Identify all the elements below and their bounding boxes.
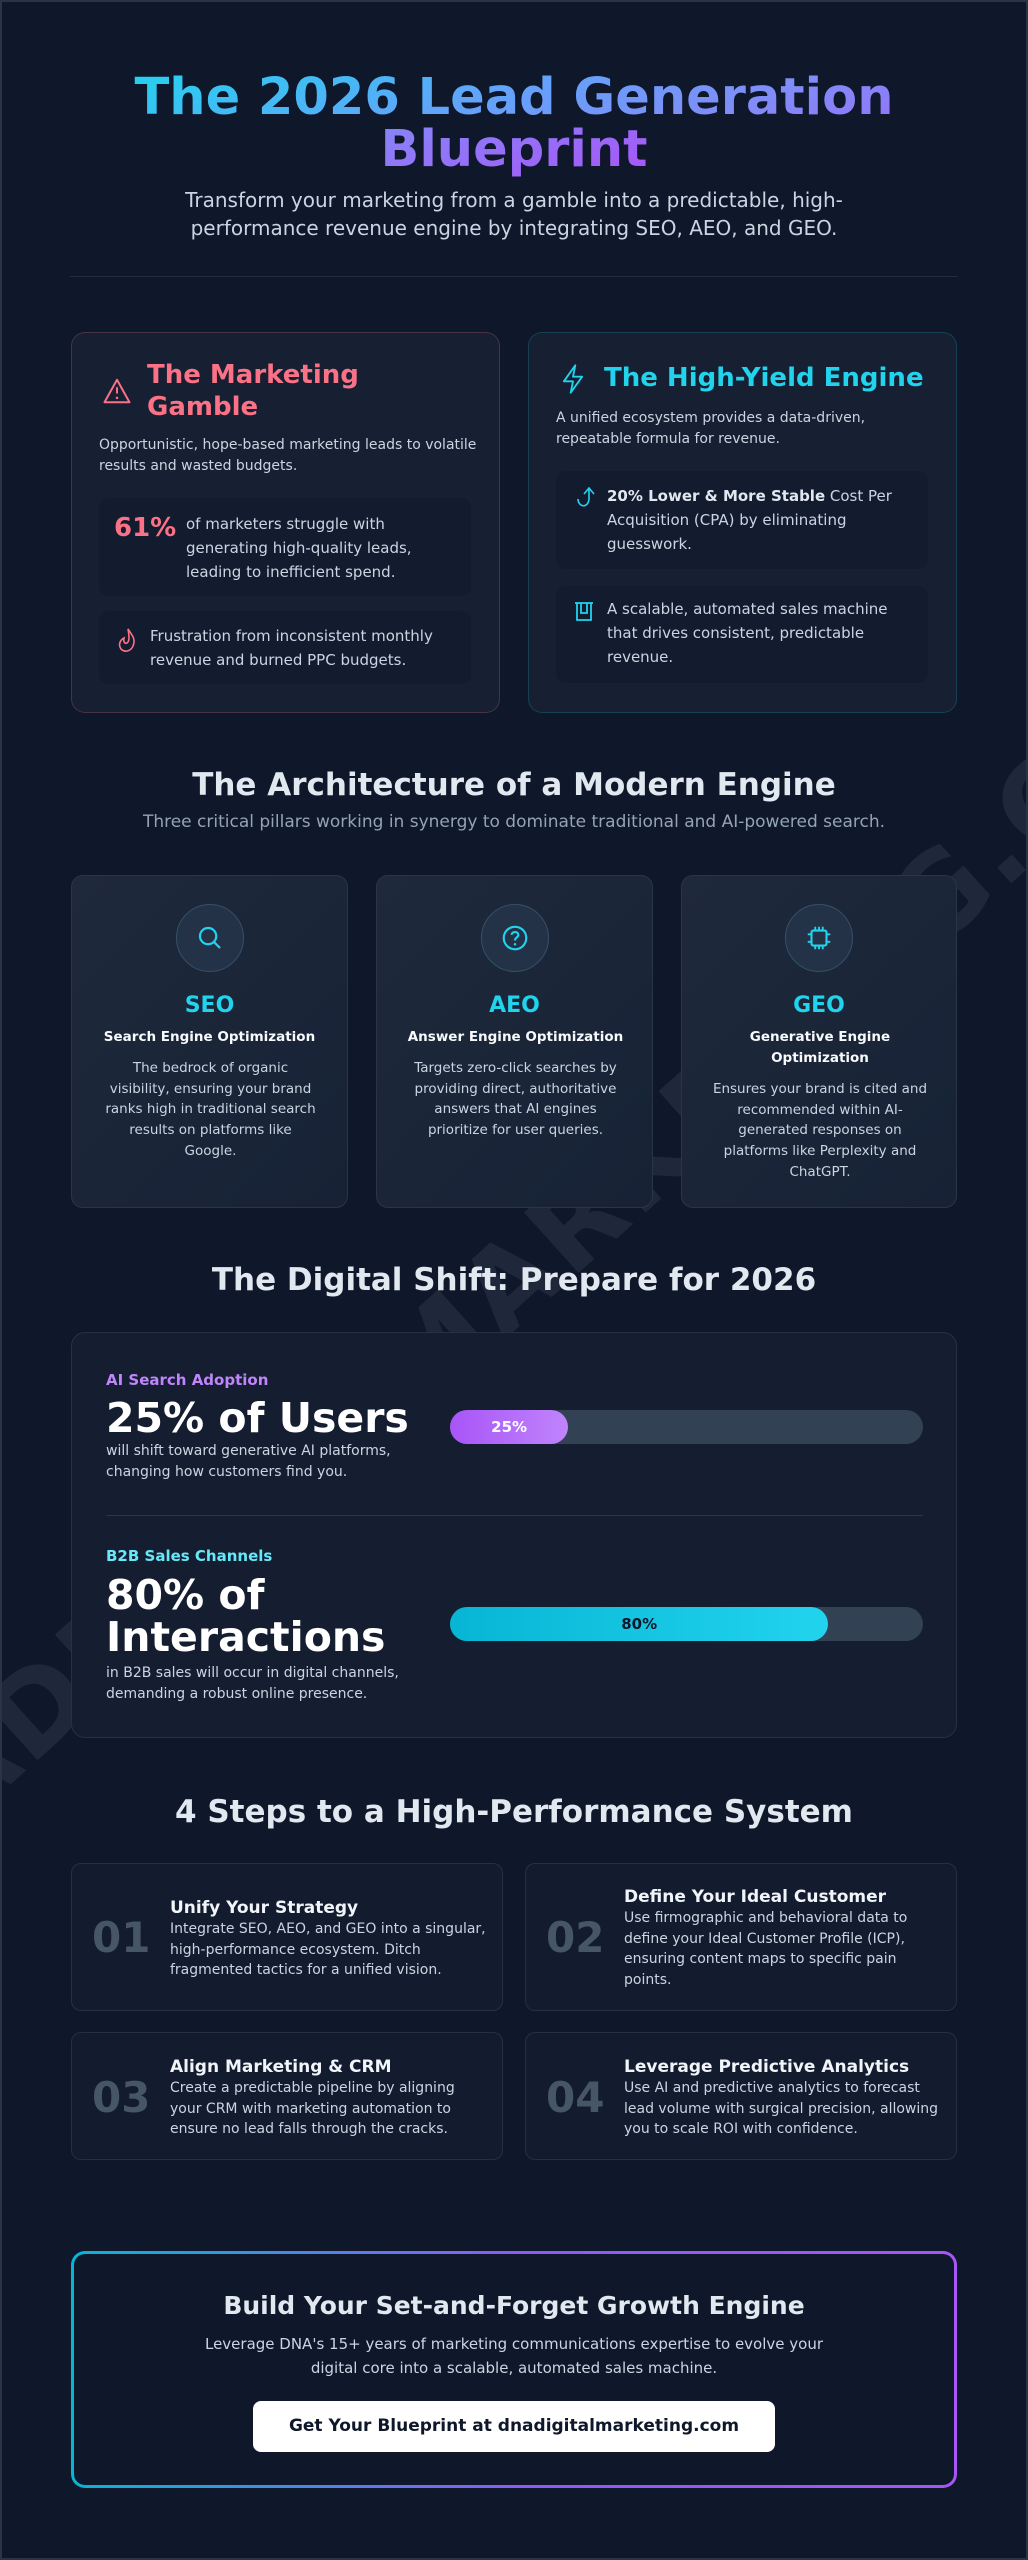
step 01: Integrate SEO, AEO, and GEO into a singular, high-performance ecosystem. Ditch fragmented tactics for a unified vision. (170, 1921, 486, 1978)
card: SEO: The bedrock of organic visibility, ensuring your brand ranks high in traditional search results on platforms like Google. (105, 1060, 316, 1159)
stat box: 61%: of marketers struggle with generating high-quality leads, leading to inefficient spend. (186, 515, 412, 581)
callout: CTA (71, 2251, 957, 2488)
heading: The Marketing (147, 360, 359, 390)
stat: AI search adoption: 25% of Users (106, 1394, 409, 1442)
icon: chip (785, 904, 853, 972)
card: AEO: Targets zero-click searches by providing direct, authoritative answers that AI engines prioritize for user queries. (414, 1060, 617, 1138)
step 04: 04 (546, 2073, 604, 2122)
bar chart: 80% (450, 1607, 923, 1641)
card: SEO: Search Engine Optimization (104, 1029, 315, 1045)
icon: question (480, 904, 548, 972)
heading (147, 360, 359, 422)
step 03 (71, 2032, 503, 2160)
step 03: Create a predictable pipeline by aligning your CRM with marketing automation to ensure no lead falls through the cracks. (170, 2080, 455, 2137)
stat box: frustration (99, 611, 471, 684)
step 02: Define Your Ideal Customer (624, 1887, 886, 1907)
button (253, 2401, 775, 2452)
subheading: architecture: Three critical pillars working in synergy to dominate traditional and AI-powered search. (143, 812, 885, 832)
step 02 (525, 1863, 957, 2011)
card: GEO: Ensures your brand is cited and recommended within AI-generated responses on platforms like Perplexity and ChatGPT. (713, 1081, 927, 1180)
heading: The High-Yield Engine (604, 363, 924, 393)
card: SEO (71, 875, 348, 1208)
icon: warning (104, 378, 130, 404)
card: GEO: Generative Engine Optimization (750, 1029, 890, 1066)
step 01: 01 (92, 1913, 150, 1962)
heading: 4 steps: 4 Steps to a High-Performance System (175, 1794, 853, 1830)
icon: lightning (562, 364, 584, 394)
stat box: 61% (99, 498, 471, 596)
step 01 (71, 1863, 503, 2011)
heading: digital shift: The Digital Shift: Prepare for 2026 (212, 1262, 816, 1298)
step 04: Leverage Predictive Analytics (624, 2057, 909, 2077)
card: AEO: Answer Engine Optimization (408, 1029, 623, 1045)
button: Get Your Blueprint at dnadigitalmarketing.com (289, 2416, 739, 2436)
step 04 (525, 2032, 957, 2160)
stat box: frustration: Frustration from inconsistent monthly revenue and burned PPC budgets. (150, 627, 433, 669)
title (134, 68, 894, 179)
stat: B2B sales channels (106, 1547, 399, 1702)
box: sales machine: A scalable, automated sales machine that drives consistent, predictable revenue. (607, 600, 888, 666)
bar chart: 25%: 25% (491, 1418, 527, 1436)
stat box: 61%: 61% (114, 513, 176, 543)
card: GEO (681, 875, 957, 1208)
stat: AI search adoption: AI Search Adoption (106, 1371, 268, 1389)
card: SEO: SEO (185, 993, 234, 1018)
bar chart: 25% (450, 1410, 923, 1444)
step 01: Unify Your Strategy (170, 1898, 358, 1918)
CTA text: Leverage DNA's 15+ years of marketing communications expertise to evolve your digital core into a scalable, automated sales machine. (205, 2335, 823, 2377)
card: AEO: AEO (489, 993, 540, 1018)
heading: Gamble (147, 392, 258, 422)
subtitle: Transform your marketing from a gamble into a predictable, high-performance revenue engine by integrating SEO, AEO, and GEO. (185, 188, 843, 240)
card: GEO: GEO (793, 993, 845, 1018)
box: CPA: 20% Lower & More Stable Cost Per Acquisition (CPA) by eliminating guesswork. (607, 487, 892, 553)
stat: B2B sales channels: Interactions (106, 1613, 385, 1661)
text: description: A unified ecosystem provides a data-driven, repeatable formula for revenue. (556, 410, 865, 447)
CTA heading: Build Your Set-and-Forget Growth Engine (223, 2291, 805, 2320)
stat: B2B sales channels: 80% of (106, 1571, 264, 1619)
step 04: Use AI and predictive analytics to forecast lead volume with surgical precision, allowing you to scale ROI with confidence. (624, 2080, 938, 2137)
heading: architecture: The Architecture of a Modern Engine (192, 767, 836, 803)
stat: AI search adoption (106, 1371, 409, 1480)
step 02: Use firmographic and behavioral data to define your Ideal Customer Profile (ICP), ensuring content maps to specific pain points. (624, 1910, 907, 1988)
step 02: 02 (546, 1913, 604, 1962)
panel: the high-yield engine (528, 332, 957, 713)
stat: B2B sales channels: in B2B sales will occur in digital channels, demanding a robust online presence. (106, 1665, 399, 1702)
text: description: Opportunistic, hope-based marketing leads to volatile results and wasted budgets. (99, 437, 476, 474)
step 03: 03 (92, 2073, 150, 2122)
box: CPA (556, 471, 928, 569)
title: The 2026 Lead Generation (134, 68, 894, 127)
box: sales machine (556, 586, 928, 683)
panel: the marketing gamble (71, 332, 500, 713)
bar chart: 80%: 80% (621, 1615, 657, 1633)
stat: AI search adoption: will shift toward generative AI platforms, changing how customers find you. (106, 1443, 391, 1480)
icon: search (176, 904, 244, 972)
stat: B2B sales channels: B2B Sales Channels (106, 1547, 272, 1565)
step 03: Align Marketing & CRM (170, 2057, 392, 2077)
title: Blueprint (380, 120, 648, 179)
panel: stats (71, 1332, 957, 1738)
card: AEO (376, 875, 653, 1208)
